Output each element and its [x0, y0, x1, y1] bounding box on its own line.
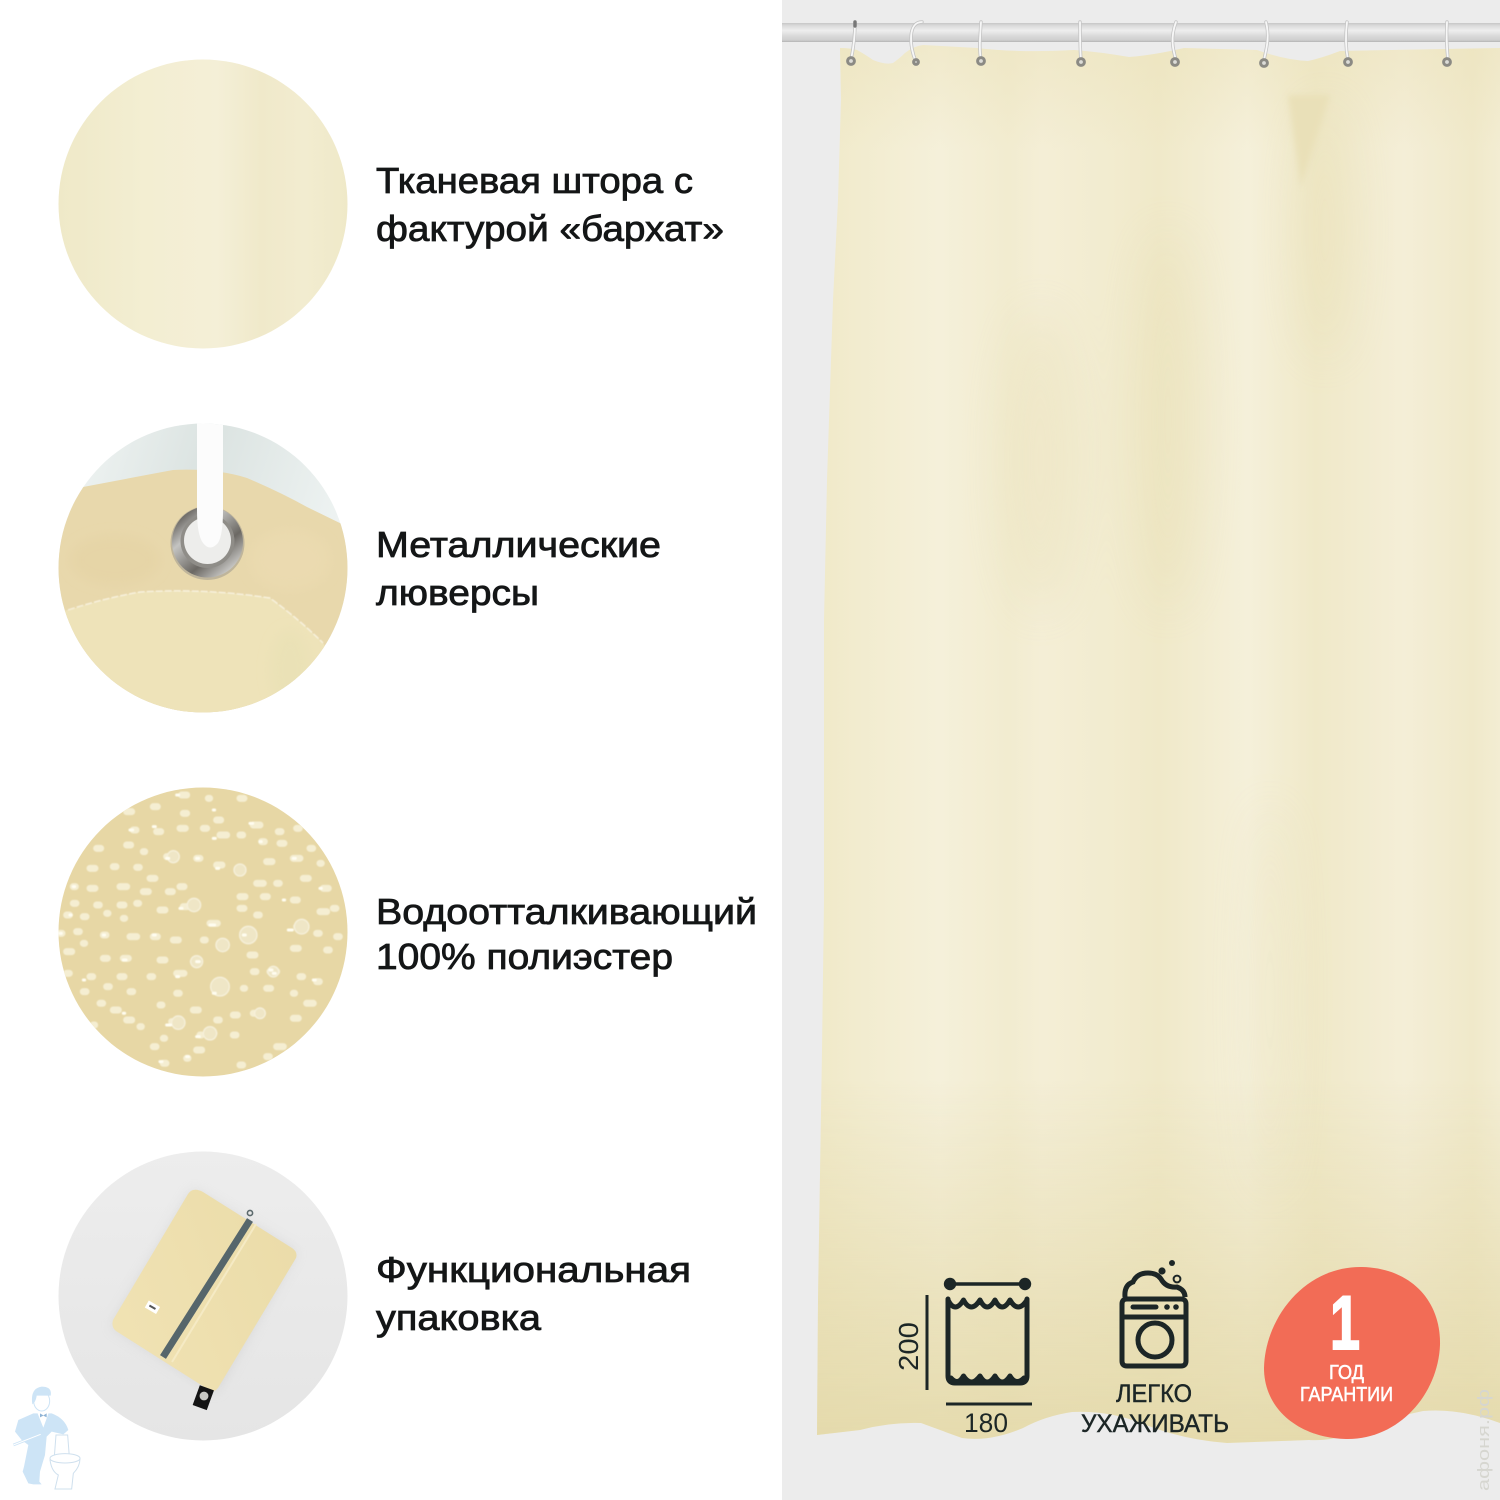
- heading: metal grommets: люверсы: [376, 572, 539, 613]
- fabric lower panel: [65, 591, 325, 712]
- heading: water repellent: 100% полиэстер: [376, 936, 673, 977]
- curtain rod: [782, 23, 1500, 42]
- logo: plumber: [13, 1387, 80, 1489]
- tag: [193, 1385, 214, 1410]
- heading: water repellent: Водоотталкивающий: [376, 891, 757, 932]
- heading: package: Функциональная: [376, 1249, 691, 1290]
- fabric upper band: [50, 470, 350, 720]
- rod: [944, 1278, 1031, 1290]
- watermark: афоня.рф: [1474, 1389, 1493, 1491]
- bag shadow: [112, 1190, 296, 1392]
- fabric shading: [70, 530, 330, 590]
- curtain rings: [848, 22, 1450, 66]
- circle: package: [58, 1152, 348, 1440]
- width line: [946, 1402, 1032, 1406]
- icon: curtain size: [893, 1278, 1032, 1438]
- badge: warranty: 1: [1330, 1281, 1360, 1366]
- curtain: [810, 40, 1500, 1450]
- grommet ring: [170, 506, 244, 580]
- badge: warranty: [1264, 1267, 1440, 1439]
- easy care label: ЛЕГКО: [1116, 1380, 1192, 1408]
- zipper pull: [247, 1210, 253, 1216]
- height line: [926, 1295, 928, 1390]
- stitch line: [68, 591, 323, 643]
- label: [145, 1301, 160, 1314]
- circle: water droplets: [58, 787, 348, 1077]
- heading: fabric curtain: Тканевая штора с: [376, 160, 693, 201]
- hook: [197, 420, 223, 548]
- heading: metal grommets: Металлические: [376, 524, 661, 565]
- badge: warranty: ГАРАНТИИ: [1300, 1384, 1393, 1406]
- circle: metal grommet: [50, 420, 350, 720]
- zipper fold: [172, 1224, 256, 1362]
- circle: fabric texture: [58, 60, 348, 348]
- height value: 200: [893, 1322, 924, 1371]
- zipper: [163, 1220, 250, 1357]
- bag: [112, 1190, 296, 1391]
- heading: package: упаковка: [376, 1297, 542, 1338]
- curtain outline: [948, 1299, 1027, 1383]
- icon: washing machine: [1122, 1260, 1186, 1366]
- easy care label: УХАЖИВАТЬ: [1081, 1410, 1229, 1438]
- heading: fabric curtain: фактурой «бархат»: [376, 208, 724, 249]
- badge: warranty: ГОД: [1329, 1362, 1364, 1384]
- lower panel shading: [270, 630, 310, 710]
- width value: 180: [964, 1408, 1008, 1438]
- right panel background: [782, 0, 1500, 1500]
